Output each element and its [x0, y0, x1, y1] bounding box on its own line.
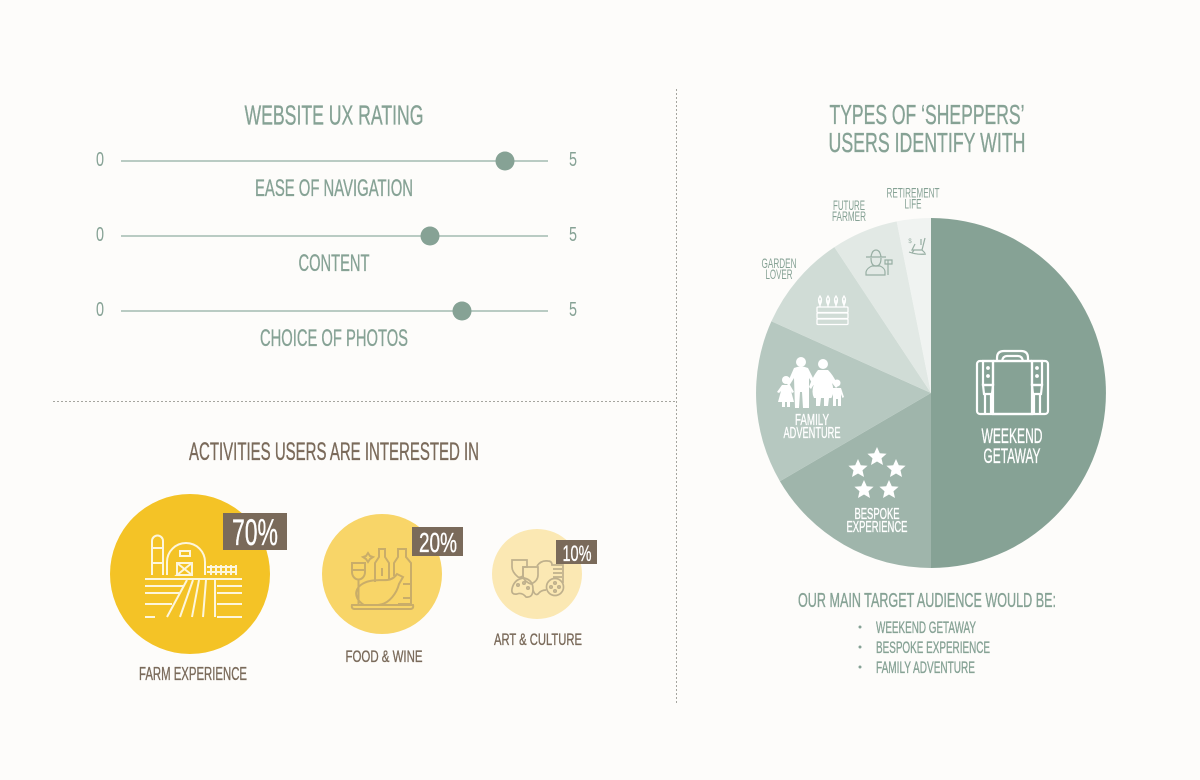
slice: weekend getaway: WEEKEND	[982, 425, 1042, 448]
badge: 70%	[223, 512, 287, 553]
slice: retirement life	[897, 218, 931, 393]
slice: retirement life: $	[908, 239, 912, 245]
slider: content: 0	[96, 224, 104, 246]
activity: art and culture	[492, 529, 597, 649]
slider: content: 5	[569, 224, 577, 246]
label: future farmer: FARMER	[832, 208, 866, 224]
activity: farm experience	[110, 494, 287, 684]
slice: garden lover	[771, 247, 931, 393]
slider: content	[96, 224, 577, 277]
label: retirement life: LIFE	[904, 196, 922, 212]
label: art and culture: ART & CULTURE	[494, 630, 582, 649]
slice: family adventure	[756, 321, 931, 481]
label: garden lover: LOVER	[766, 266, 792, 282]
slider: choice of photos: 0	[96, 299, 104, 321]
text block: main target audience: WEEKEND GETAWAY	[876, 618, 976, 637]
text block: main target audience	[798, 590, 1056, 677]
label: garden lover	[762, 255, 796, 282]
label: future farmer: FUTURE	[833, 197, 865, 213]
slice: bespoke experience	[780, 393, 931, 568]
icon: rocking chair	[909, 238, 926, 254]
slider: ease of navigation: 5	[569, 149, 577, 171]
slice: bespoke experience: EXPERIENCE	[846, 519, 908, 536]
icon: farm	[145, 536, 242, 617]
activity: food and wine	[322, 514, 463, 666]
icon: five stars	[848, 447, 906, 498]
slider: choice of photos: 5	[569, 299, 577, 321]
text block: main target audience: FAMILY ADVENTURE	[876, 658, 975, 677]
slice: weekend getaway	[931, 218, 1106, 568]
icon: food and wine	[352, 549, 413, 609]
icon: family	[777, 357, 844, 408]
label: retirement life: RETIREMENT	[886, 184, 940, 200]
heading: types of sheppers: USERS IDENTIFY WITH	[828, 127, 1026, 158]
slice: family adventure: FAMILY	[795, 412, 829, 429]
text block: main target audience: OUR MAIN TARGET AUDIENCE WOULD BE:	[798, 590, 1056, 612]
label: garden lover: GARDEN	[762, 255, 796, 271]
icon: garden bed	[817, 296, 848, 324]
label: retirement life	[886, 184, 940, 212]
heading: website UX rating: WEBSITE UX RATING	[244, 100, 424, 130]
heading: activities users are interested in: ACTIVITIES USERS ARE INTERESTED IN	[189, 438, 479, 466]
slice: future farmer	[834, 221, 931, 393]
panel: website UX rating sliders	[96, 149, 577, 352]
slider: choice of photos	[96, 299, 577, 352]
heading: types of sheppers: TYPES OF ‘SHEPPERS’	[830, 99, 1024, 130]
label: future farmer	[832, 197, 866, 224]
heading: types of sheppers	[828, 99, 1026, 158]
slice: family adventure: ADVENTURE	[784, 425, 840, 442]
badge: 10%: 10%	[562, 541, 592, 566]
slice: bespoke experience: BESPOKE	[854, 506, 900, 523]
icon: suitcase	[977, 351, 1048, 414]
label: farm experience: FARM EXPERIENCE	[139, 664, 247, 684]
slider: ease of navigation: EASE OF NAVIGATION	[255, 175, 413, 202]
slider: content: CONTENT	[298, 250, 370, 277]
slider: ease of navigation: 0	[96, 149, 104, 171]
badge: 20%	[412, 527, 463, 558]
slice: weekend getaway: GETAWAY	[984, 445, 1040, 468]
badge: 20%: 20%	[419, 527, 457, 558]
label: food and wine: FOOD & WINE	[346, 647, 422, 666]
icon: farmer	[866, 250, 892, 275]
icon: art and culture	[512, 560, 564, 597]
text block: main target audience: BESPOKE EXPERIENCE	[876, 638, 990, 657]
pie chart: sheppers types	[756, 218, 1106, 568]
badge: 70%: 70%	[232, 512, 278, 553]
slider: ease of navigation	[96, 149, 577, 202]
slider: choice of photos: CHOICE OF PHOTOS	[260, 325, 408, 352]
